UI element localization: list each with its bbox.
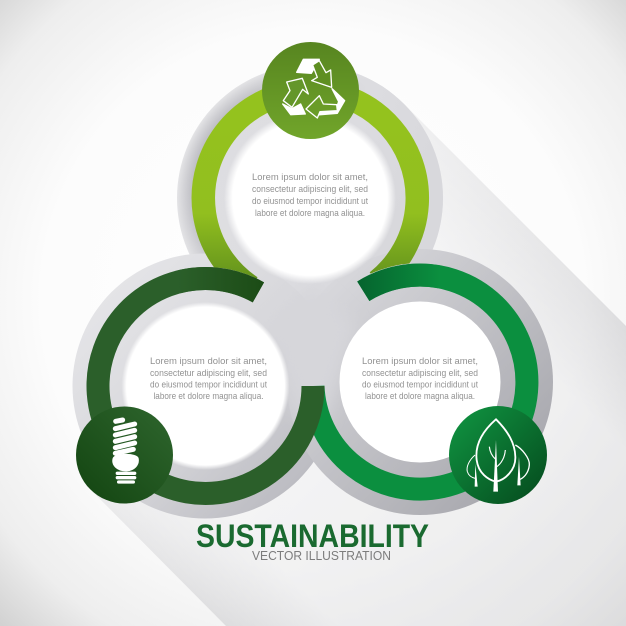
gray base discs bbox=[72, 65, 553, 518]
text block: left: do eiusmod tempor incididunt ut bbox=[150, 380, 267, 390]
text block: top: labore et dolore magna aliqua. bbox=[255, 208, 365, 219]
icon: light bulb bbox=[76, 406, 173, 504]
text block: right bbox=[362, 356, 478, 402]
text block: right: Lorem ipsum dolor sit amet, bbox=[362, 356, 478, 367]
text block: left: labore et dolore magna aliqua. bbox=[154, 391, 264, 402]
long shadow bbox=[90, 104, 626, 626]
text block: right: do eiusmod tempor incididunt ut bbox=[362, 380, 478, 390]
text block: right: labore et dolore magna aliqua. bbox=[365, 391, 475, 402]
text block: left bbox=[150, 356, 267, 402]
emerald ring arc bbox=[313, 275, 527, 489]
icon: recycle bbox=[262, 42, 359, 139]
text block: top: Lorem ipsum dolor sit amet, bbox=[252, 172, 368, 183]
text block: top: consectetur adipiscing elit, sed bbox=[252, 184, 368, 195]
panel: left circle bbox=[122, 302, 290, 470]
text block: left: Lorem ipsum dolor sit amet, bbox=[150, 356, 267, 367]
panel: right circle bbox=[340, 302, 500, 462]
dark green ring arc bbox=[98, 278, 313, 493]
text block: top bbox=[252, 172, 368, 219]
lime ring arc bbox=[203, 91, 417, 287]
panel: top circle bbox=[224, 112, 396, 284]
text block: right: consectetur adipiscing elit, sed bbox=[362, 368, 478, 379]
icon: trees bbox=[449, 406, 547, 504]
text block: top: do eiusmod tempor incididunt ut bbox=[252, 196, 368, 207]
text block: left: consectetur adipiscing elit, sed bbox=[150, 368, 267, 379]
title: SUSTAINABILITY bbox=[196, 518, 429, 554]
subtitle: VECTOR ILLUSTRATION bbox=[252, 549, 391, 563]
